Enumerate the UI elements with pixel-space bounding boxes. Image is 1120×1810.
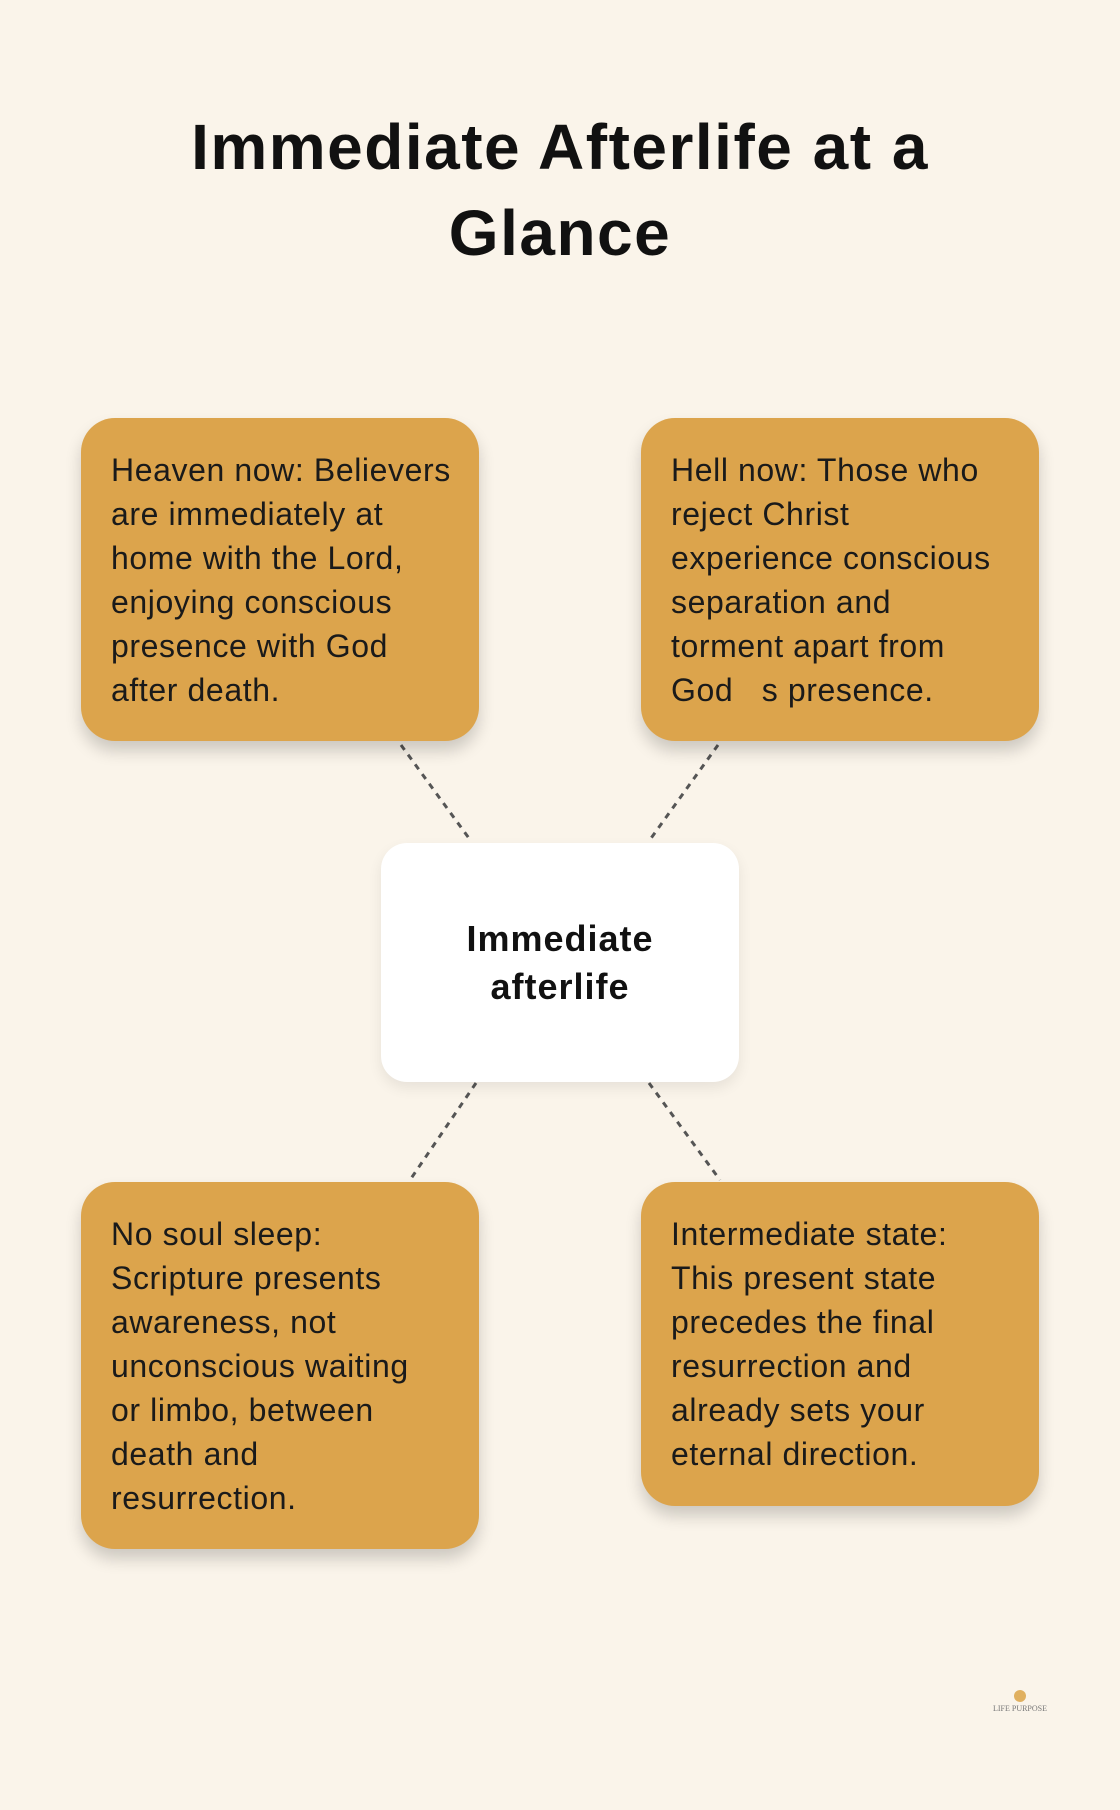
panel: heaven now: enjoying conscious bbox=[111, 584, 392, 620]
panel: intermediate state: eternal direction. bbox=[671, 1436, 918, 1472]
panel: hell now: experience conscious bbox=[671, 540, 991, 576]
panel: hell now bbox=[641, 418, 1039, 741]
panel: no soul sleep: No soul sleep: bbox=[111, 1216, 322, 1252]
center node bbox=[381, 843, 739, 1082]
panel: no soul sleep: awareness, not bbox=[111, 1304, 336, 1340]
panel: heaven now: are immediately at bbox=[111, 496, 383, 532]
panel: intermediate state: precedes the final bbox=[671, 1304, 934, 1340]
center node: Immediate bbox=[466, 918, 654, 958]
title: Immediate Afterlife at a bbox=[191, 111, 929, 183]
panel: intermediate state: Intermediate state: bbox=[671, 1216, 947, 1252]
panel: heaven now: after death. bbox=[111, 672, 280, 708]
panel: intermediate state: already sets your bbox=[671, 1392, 925, 1428]
panel: no soul sleep: Scripture presents bbox=[111, 1260, 381, 1296]
logo: LIFE PURPOSE bbox=[993, 1704, 1047, 1713]
panel: heaven now: Heaven now: Believers bbox=[111, 452, 451, 488]
panel: heaven now bbox=[81, 418, 479, 741]
title bbox=[191, 111, 929, 269]
panel: hell now: Hell now: Those who bbox=[671, 452, 979, 488]
panel: no soul sleep: unconscious waiting bbox=[111, 1348, 409, 1384]
panel: hell now: God s presence. bbox=[671, 672, 934, 708]
panel: intermediate state: resurrection and bbox=[671, 1348, 912, 1384]
logo bbox=[993, 1690, 1047, 1713]
panel: no soul sleep: or limbo, between bbox=[111, 1392, 374, 1428]
panel: intermediate state bbox=[641, 1182, 1039, 1506]
center node: afterlife bbox=[490, 966, 630, 1006]
panel: hell now: torment apart from bbox=[671, 628, 945, 664]
panel: no soul sleep: death and bbox=[111, 1436, 259, 1472]
panel: hell now: separation and bbox=[671, 584, 891, 620]
panel: intermediate state: This present state bbox=[671, 1260, 936, 1296]
panel: heaven now: home with the Lord, bbox=[111, 540, 403, 576]
panel: no soul sleep bbox=[81, 1182, 479, 1549]
panel: hell now: reject Christ bbox=[671, 496, 850, 532]
panel: heaven now: presence with God bbox=[111, 628, 388, 664]
panel: no soul sleep: resurrection. bbox=[111, 1480, 297, 1516]
title: Glance bbox=[449, 197, 671, 269]
